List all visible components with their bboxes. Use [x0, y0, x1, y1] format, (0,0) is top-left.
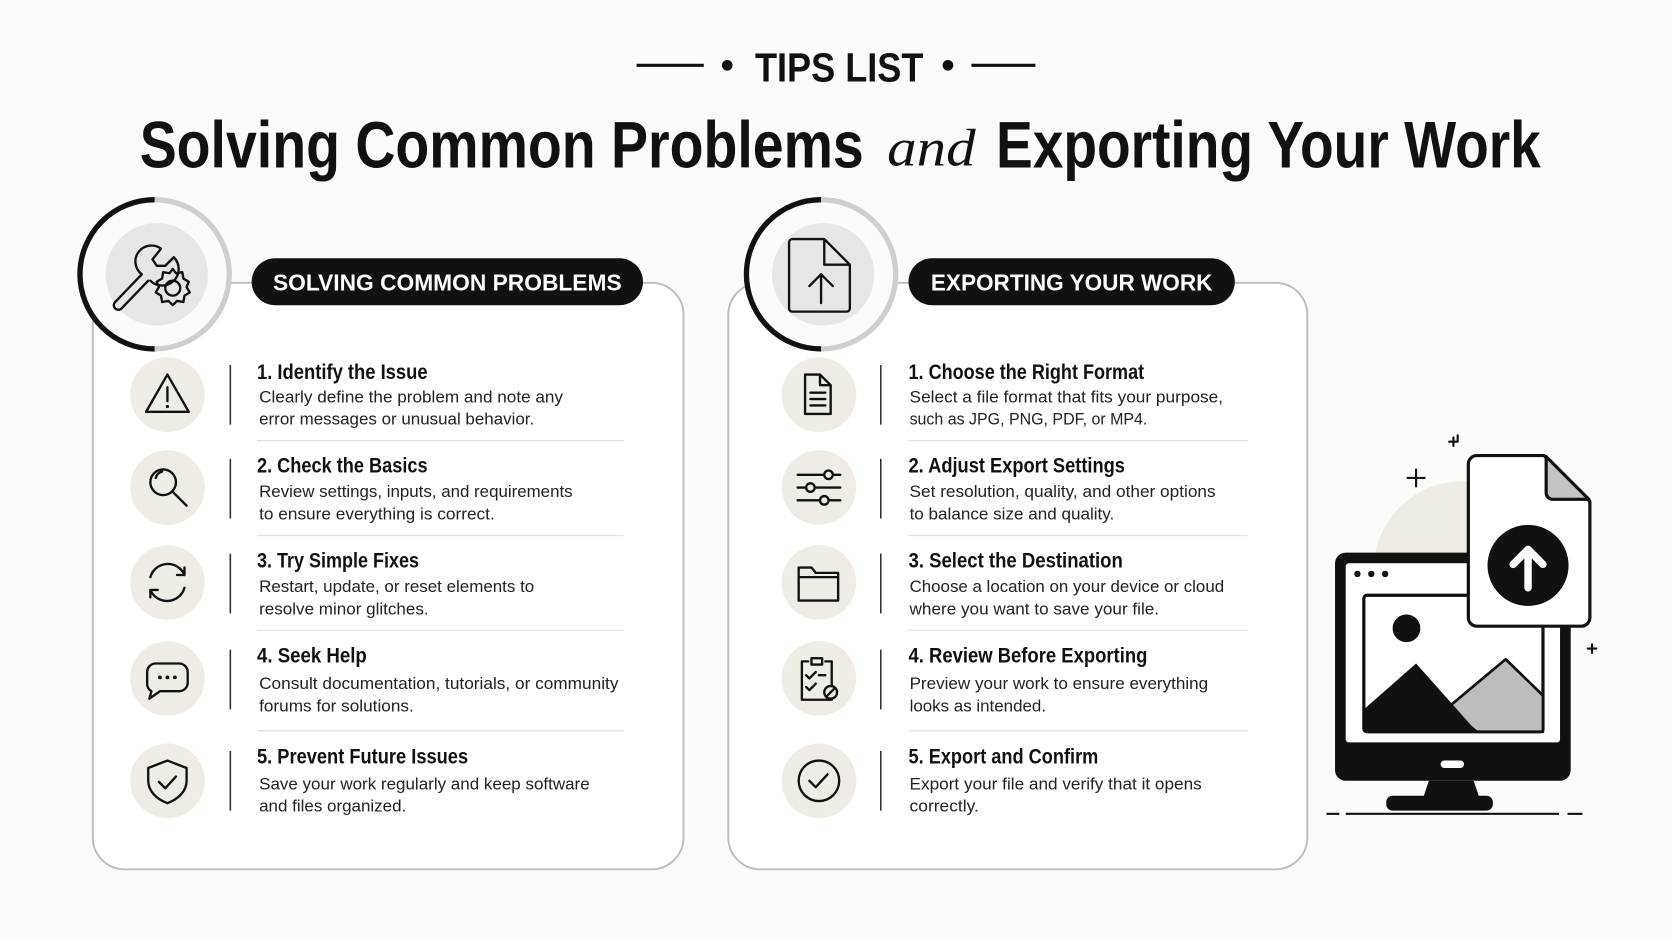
item 1: identify the issue: Clearly define the problem and note any — [259, 387, 563, 406]
item 1: identify the issue: error messages or unusual behavior. — [259, 410, 534, 429]
title — [140, 109, 1541, 183]
item 5: prevent future issues: 5. Prevent Future Issues — [257, 745, 468, 769]
item 4: review before exporting: 4. Review Before Exporting — [909, 643, 1147, 667]
item 4: seek help — [130, 641, 619, 716]
item 4: seek help: 4. Seek Help — [257, 643, 367, 667]
illustration: monitor with uploading file — [1327, 435, 1596, 814]
item 1: identify the issue: 1. Identify the Issue — [257, 360, 428, 384]
item 1: choose the right format: 1. Choose the Right Format — [909, 360, 1144, 384]
heading pill — [252, 258, 643, 305]
title: Exporting Your Work — [996, 109, 1541, 183]
item 5: export and confirm: Export your file and verify that it opens — [910, 774, 1202, 793]
item 2: check the basics — [130, 450, 573, 525]
item 1: choose the right format: such as JPG, PNG, PDF, or MP4. — [910, 410, 1147, 429]
panel: solving common problems — [80, 200, 684, 869]
panel: exporting your work — [728, 200, 1307, 869]
icon: wrench and gear badge — [80, 200, 229, 349]
item 5: prevent future issues: and files organized. — [259, 797, 406, 816]
heading pill: EXPORTING YOUR WORK — [931, 269, 1212, 295]
sparkles — [1408, 435, 1596, 653]
item 3: try simple fixes — [130, 545, 534, 620]
title: and — [887, 118, 976, 178]
item 3: select the destination: where you want to save your file. — [909, 599, 1159, 618]
item 3: try simple fixes: Restart, update, or reset elements to — [259, 577, 534, 596]
item 2: adjust export settings: Set resolution, quality, and other options — [910, 482, 1216, 501]
item 2: adjust export settings — [782, 450, 1216, 525]
item 4: review before exporting: Preview your work to ensure everything — [910, 674, 1208, 693]
eyebrow: tips list: TIPS LIST — [755, 44, 924, 90]
item 4: review before exporting: looks as intended. — [910, 696, 1046, 715]
item 3: try simple fixes: 3. Try Simple Fixes — [257, 549, 419, 573]
item 5: export and confirm: 5. Export and Confirm — [909, 745, 1098, 769]
item 1: choose the right format: Select a file format that fits your purpose, — [910, 387, 1223, 406]
item 4: review before exporting — [782, 641, 1208, 716]
item 3: select the destination: Choose a location on your device or cloud — [910, 577, 1224, 596]
item 5: prevent future issues: Save your work regularly and keep software — [259, 774, 590, 793]
item 2: adjust export settings: 2. Adjust Export Settings — [909, 454, 1125, 478]
item 1: identify the issue — [130, 357, 563, 432]
item 2: adjust export settings: to balance size and quality. — [910, 505, 1114, 524]
item 2: check the basics: Review settings, inputs, and requirements — [259, 482, 573, 501]
title: Solving Common Problems — [140, 109, 864, 183]
item 2: check the basics: 2. Check the Basics — [257, 454, 428, 478]
eyebrow: tips list — [637, 44, 1035, 90]
item 2: check the basics: to ensure everything is correct. — [259, 505, 495, 524]
item 3: select the destination: 3. Select the Destination — [909, 549, 1123, 573]
item 5: export and confirm: correctly. — [910, 797, 979, 816]
heading pill — [909, 258, 1235, 305]
item 4: seek help: Consult documentation, tutorials, or community — [259, 674, 619, 693]
item 3: try simple fixes: resolve minor glitches. — [259, 599, 429, 618]
item 5: export and confirm — [782, 743, 1202, 818]
icon: file upload badge — [746, 200, 896, 349]
heading pill: SOLVING COMMON PROBLEMS — [273, 269, 622, 295]
item 5: prevent future issues — [130, 743, 590, 818]
item 1: choose the right format — [782, 357, 1223, 432]
item 4: seek help: forums for solutions. — [259, 696, 414, 715]
item 3: select the destination — [782, 545, 1224, 620]
